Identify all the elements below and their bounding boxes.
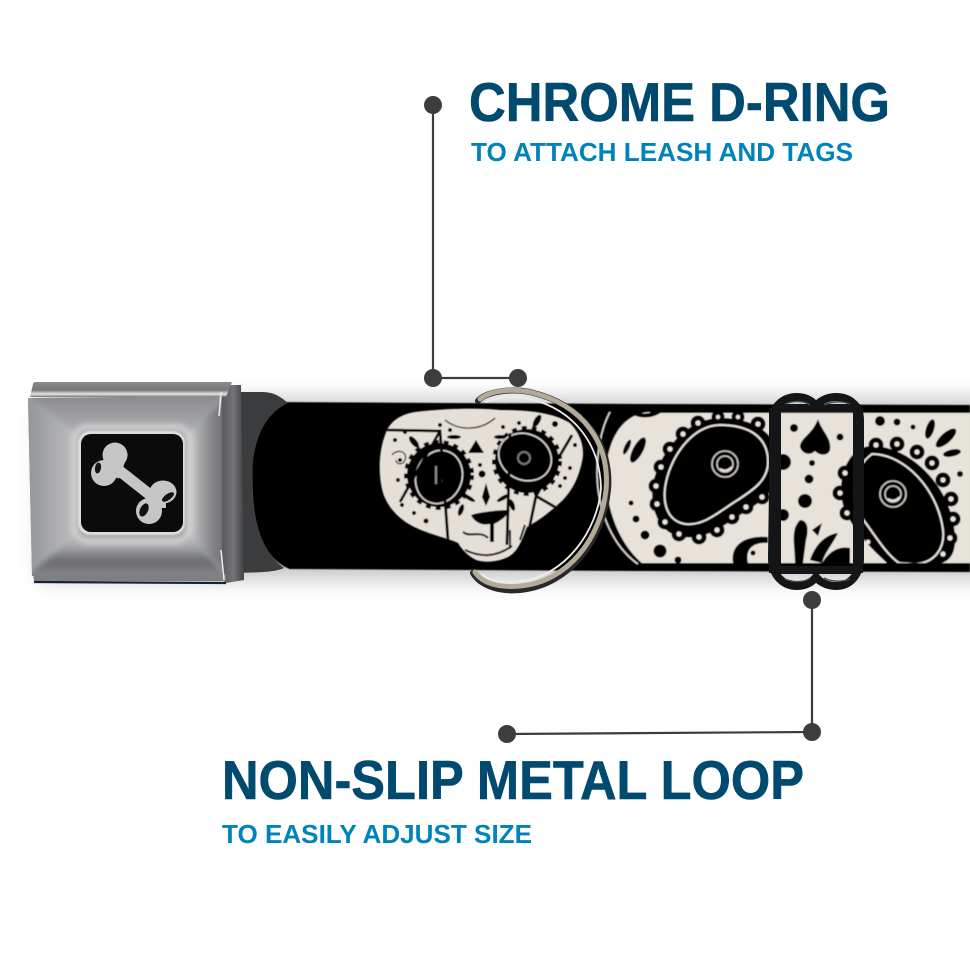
- bone badge: [78, 431, 185, 535]
- buckle top band: [30, 382, 232, 397]
- scratched cut lines: [360, 410, 572, 545]
- non-slip metal loop: [769, 397, 863, 586]
- bevel highlights: [74, 427, 190, 541]
- seatbelt buckle: [20, 382, 300, 583]
- strap fabric: cream big skull section: [606, 412, 970, 564]
- chrome D-ring: [473, 390, 608, 590]
- strap fabric: black section: [252, 402, 970, 572]
- big skull curl marks: [630, 411, 660, 416]
- heading: chrome d-ring: CHROME D-RING: [469, 71, 890, 133]
- bevel left: [28, 399, 74, 568]
- big skull teardrop marks: [621, 435, 650, 540]
- buckle right side bar: [218, 385, 244, 583]
- right eye: [491, 425, 560, 494]
- collar strap: [252, 402, 970, 572]
- bone icon: [91, 442, 176, 524]
- heading: non-slip metal loop: NON-SLIP METAL LOOP: [222, 749, 804, 811]
- skull pattern marks: [393, 413, 577, 524]
- subheading: to easily adjust size: TO EASILY ADJUST SIZE: [222, 819, 532, 849]
- callout leader: metal loop: [498, 591, 821, 743]
- callout leader: D-ring: [424, 96, 527, 387]
- buckle tail behind strap: [240, 392, 288, 573]
- buckle lower edge: [33, 574, 226, 581]
- bevel right: [188, 400, 222, 569]
- skull base: [380, 409, 583, 562]
- big skull outer outline: [597, 412, 638, 564]
- buckle face: [28, 396, 222, 576]
- paisley right: [832, 436, 960, 566]
- belt drop shadow: [40, 398, 970, 580]
- subheading: to attach leash and tags: TO ATTACH LEASH AND TAGS: [471, 137, 853, 167]
- nose and mouth: [463, 510, 525, 555]
- bevel bottom: [32, 548, 222, 576]
- buckle clasp notches: [219, 392, 224, 580]
- strap pattern: dots, heart and leaves: [640, 405, 970, 568]
- bevel top: [30, 396, 222, 413]
- cat sugar skull: [360, 409, 583, 562]
- left eye: [406, 442, 472, 510]
- paisley left: [648, 410, 781, 544]
